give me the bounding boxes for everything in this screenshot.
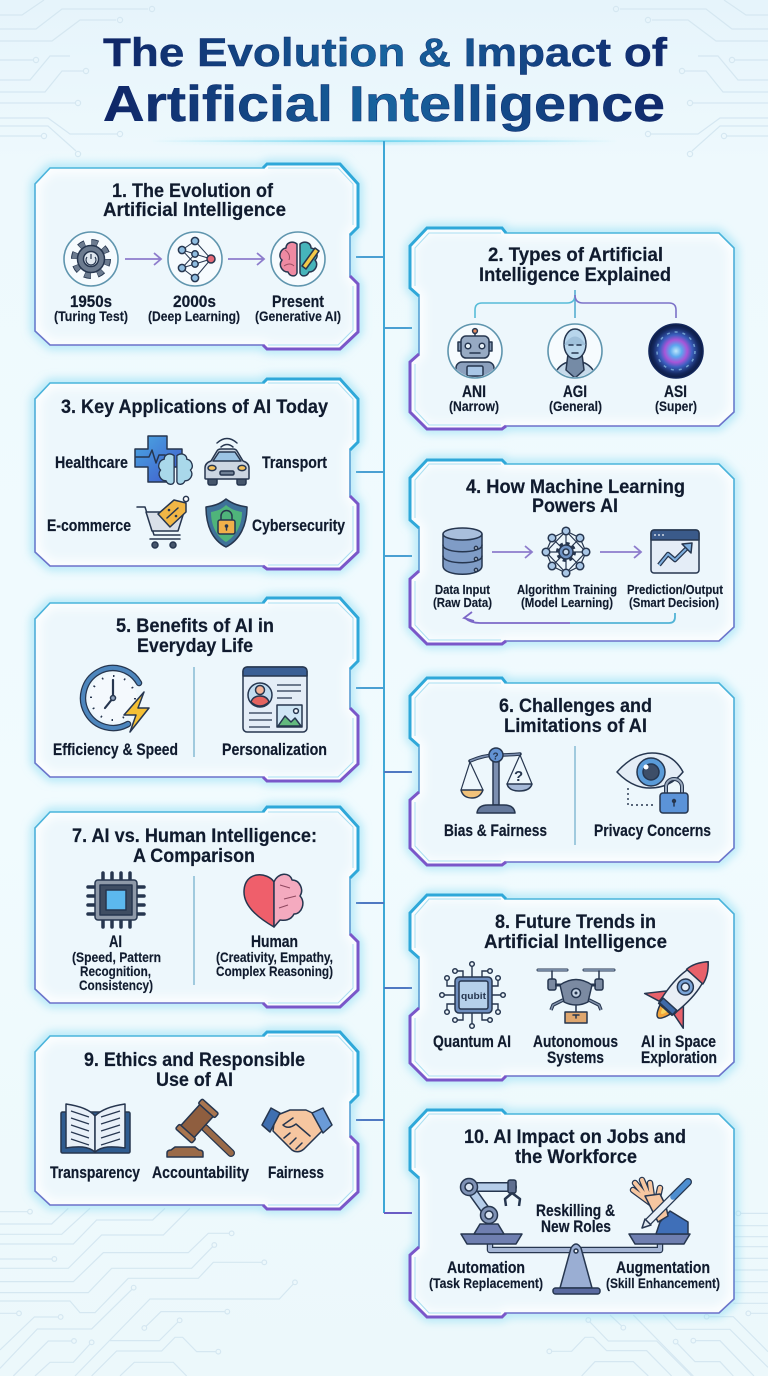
title: The Evolution & Impact of (103, 31, 668, 75)
circuit pattern: top corners (0, 0, 768, 157)
panel 6 heading (499, 696, 652, 737)
timeline labels: (Generative AI) (255, 308, 341, 324)
icon: processor chip (88, 873, 144, 927)
panel 6 heading: Limitations of AI (504, 716, 647, 737)
icon: hand with pen (633, 1180, 688, 1234)
panel 10 frame (410, 1110, 734, 1317)
panel 5 heading (116, 616, 274, 657)
process labels: (Raw Data) (433, 595, 492, 610)
panel 4 heading: Powers AI (532, 496, 618, 517)
panel 4: machine learning (410, 460, 734, 644)
icon: eye with padlock (617, 753, 688, 813)
panel 2 heading: Intelligence Explained (479, 265, 671, 286)
divider (574, 746, 576, 845)
panel 1 heading: 1. The Evolution of (112, 181, 274, 202)
panel 5 heading: Everyday Life (137, 636, 253, 657)
comparison labels: AI (109, 933, 122, 951)
type labels: AGI (563, 383, 587, 401)
panel 6 heading: 6. Challenges and (499, 696, 652, 717)
panel 8 heading: Artificial Intelligence (484, 932, 667, 953)
icon: rocket (639, 944, 727, 1035)
panel 7: AI vs human (35, 807, 358, 1007)
type labels: ASI (664, 383, 687, 401)
icon: generative brain (271, 232, 325, 286)
future trend labels: Autonomous (533, 1033, 618, 1051)
title: Artificial Intelligence (103, 76, 665, 132)
panel 1 frame (35, 164, 358, 349)
branch connector (475, 290, 676, 318)
workforce labels: Reskilling & (536, 1202, 615, 1220)
process labels (433, 582, 724, 610)
panel 8: future trends (410, 895, 734, 1080)
panel 10 heading: the Workforce (515, 1147, 637, 1168)
icon: open book (61, 1104, 130, 1153)
icon: training network (542, 527, 590, 577)
circuit pattern: bottom right (547, 1211, 768, 1376)
arrow (125, 253, 161, 265)
icon: shopping cart (137, 496, 189, 548)
panel 6: challenges (410, 678, 734, 865)
icon: scales of justice: ? (492, 752, 499, 762)
workforce labels (429, 1202, 720, 1291)
challenge labels: Privacy Concerns (594, 822, 711, 840)
workforce labels: (Skill Enhancement) (606, 1275, 720, 1291)
benefit labels: Efficiency & Speed (53, 741, 178, 759)
icon: heart and brain (244, 874, 303, 927)
panel 3 heading: 3. Key Applications of AI Today (61, 397, 328, 418)
panel 1: evolution (35, 164, 358, 349)
future trend labels: Quantum AI (433, 1033, 511, 1051)
icon: delivery drone (538, 970, 614, 1023)
panel 3 frame (35, 379, 358, 569)
icon: android head (548, 324, 602, 382)
icon: scales of justice: ? (514, 768, 523, 785)
icon: quantum chip: qubit (461, 991, 487, 1002)
icon: handshake (262, 1108, 332, 1152)
panel 9 heading: Use of AI (156, 1070, 233, 1091)
feedback arrow (464, 612, 675, 623)
ethics labels: Transparency (50, 1164, 140, 1182)
application labels: E-commerce (47, 517, 131, 535)
icon: super intelligence orb (649, 324, 703, 378)
icon: scales of justice (461, 748, 532, 813)
icon: neural network (168, 232, 222, 286)
icon: balance scale (461, 1234, 690, 1294)
panel 4 heading: 4. How Machine Learning (466, 477, 685, 498)
panel 10 heading (464, 1127, 686, 1168)
process labels: (Model Learning) (521, 595, 613, 610)
panel 2 heading: 2. Types of Artificial (488, 245, 663, 266)
comparison labels: Complex Reasoning) (216, 963, 333, 979)
icon: robot (448, 324, 502, 382)
workforce labels: Automation (447, 1259, 525, 1277)
timeline labels: Present (272, 293, 324, 311)
icon: gear (64, 232, 118, 286)
panel 5: benefits (35, 598, 358, 781)
icon: personalized profile window (243, 667, 307, 732)
comparison labels: Human (251, 933, 298, 951)
timeline labels: 2000s (173, 293, 216, 311)
workforce labels: (Task Replacement) (429, 1275, 543, 1291)
future trend labels: AI in Space (641, 1033, 716, 1051)
timeline labels (54, 293, 341, 324)
icon: clock with lightning (83, 668, 149, 732)
comparison labels: (Speed, Pattern (72, 949, 161, 965)
type labels (449, 383, 697, 414)
panel 9 frame (35, 1032, 358, 1209)
benefit labels: Personalization (222, 741, 327, 759)
timeline labels: (Deep Learning) (148, 308, 240, 324)
panel 2 frame (410, 228, 734, 429)
panel 5 heading: 5. Benefits of AI in (116, 616, 274, 637)
panel 9 heading: 9. Ethics and Responsible (84, 1050, 305, 1071)
comparison labels: Consistency) (79, 977, 153, 993)
title (103, 31, 668, 132)
panel 4 heading (466, 477, 685, 517)
timeline labels: (Turing Test) (54, 308, 128, 324)
panel 7 heading: 7. AI vs. Human Intelligence: (72, 826, 317, 847)
application labels: Cybersecurity (252, 517, 345, 535)
panel 7 heading: A Comparison (133, 846, 255, 867)
arrow (492, 546, 532, 558)
circuit pattern: bottom left (0, 1208, 297, 1376)
arrow (600, 546, 641, 558)
process labels: (Smart Decision) (629, 595, 719, 610)
panel 5 frame (35, 598, 358, 781)
comparison labels: Recognition, (80, 963, 151, 979)
icon: prediction chart window (651, 530, 699, 573)
benefit labels (53, 741, 327, 759)
application labels: Healthcare (55, 454, 128, 472)
challenge labels (444, 822, 711, 840)
type labels: (Narrow) (449, 398, 499, 414)
panel 4 frame (410, 460, 734, 644)
icon: shield (206, 499, 247, 547)
ethics labels: Accountability (152, 1164, 249, 1182)
process labels: Data Input (435, 582, 491, 597)
workforce labels: New Roles (541, 1218, 611, 1236)
icon: quantum chip (440, 962, 505, 1028)
icon: gavel (167, 1099, 231, 1157)
panel 3: applications (35, 379, 358, 569)
panel 2: types (410, 228, 734, 429)
process labels: Algorithm Training (517, 582, 617, 597)
panel 10 heading: 10. AI Impact on Jobs and (464, 1127, 686, 1148)
icon: healthcare (135, 436, 192, 484)
icon: robotic arm (460, 1178, 520, 1234)
comparison labels: (Creativity, Empathy, (216, 949, 333, 965)
panel 2 heading (479, 245, 671, 286)
challenge labels: Bias & Fairness (444, 822, 547, 840)
future trend labels: Systems (547, 1049, 604, 1067)
divider (193, 876, 195, 985)
arrow (228, 253, 264, 265)
type labels: (Super) (655, 398, 697, 414)
type labels: ANI (462, 383, 486, 401)
icon: database (443, 528, 482, 574)
application labels: Transport (262, 454, 327, 472)
future trend labels (433, 1033, 717, 1067)
panel 9: ethics (35, 1032, 358, 1209)
timeline spine and connectors (356, 141, 412, 1213)
application labels (47, 454, 345, 535)
panel 1 heading (103, 181, 286, 221)
panel 6 frame (410, 678, 734, 865)
icon: car (205, 438, 249, 485)
type labels: (General) (549, 398, 602, 414)
panel 10: jobs and workforce (410, 1110, 734, 1317)
ethics labels (50, 1164, 324, 1182)
panel 8 heading: 8. Future Trends in (495, 912, 656, 933)
panel 1 heading: Artificial Intelligence (103, 200, 286, 221)
panel 9 heading (84, 1050, 305, 1091)
workforce labels: Augmentation (616, 1259, 710, 1277)
panel 8 frame (410, 895, 734, 1080)
panel 7 frame (35, 807, 358, 1007)
comparison labels (72, 933, 333, 993)
panel 8 heading (484, 912, 667, 953)
title underline glow (150, 138, 618, 144)
ethics labels: Fairness (268, 1164, 324, 1182)
timeline labels: 1950s (70, 293, 112, 311)
panel 7 heading (72, 826, 317, 867)
process labels: Prediction/Output (627, 582, 724, 597)
divider (193, 667, 195, 757)
future trend labels: Exploration (641, 1049, 717, 1067)
